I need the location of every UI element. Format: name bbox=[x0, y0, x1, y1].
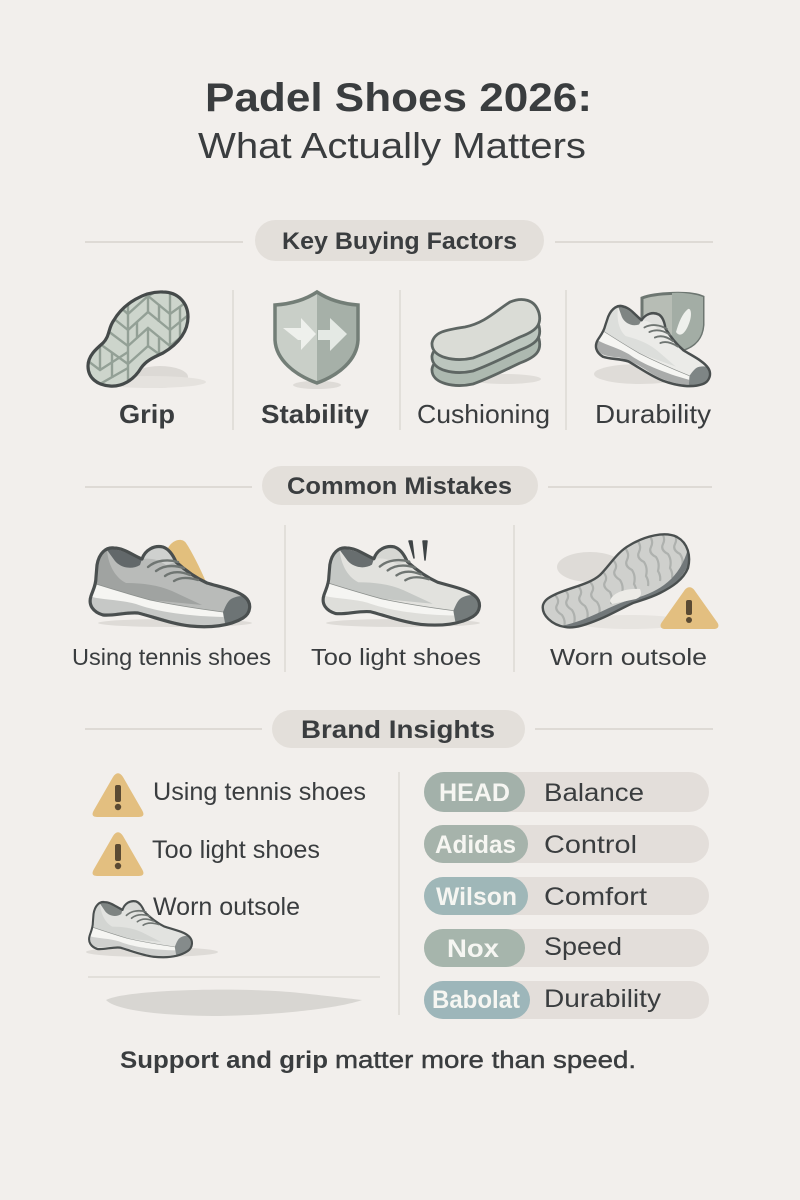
panel: using tennis shoes bbox=[72, 540, 271, 670]
row: HEAD: Balance bbox=[544, 779, 644, 807]
item: too light shoes: Too light shoes bbox=[152, 836, 320, 864]
panel: cushioning bbox=[417, 300, 550, 429]
takeaway text: Support and grip bbox=[120, 1047, 328, 1074]
label: Too light shoes bbox=[311, 644, 481, 670]
panel: too light shoes bbox=[311, 541, 481, 670]
item: using tennis shoes bbox=[93, 773, 366, 817]
section heading: Common Mistakes: Common Mistakes bbox=[287, 473, 512, 500]
panel: stability bbox=[261, 292, 370, 429]
label: Durability: Durability bbox=[595, 399, 711, 429]
icon: shield with arrows bbox=[275, 292, 358, 389]
row: Nox: Speed bbox=[544, 933, 622, 961]
row: Wilson: Wilson bbox=[436, 883, 517, 911]
panel: brand table bbox=[424, 772, 709, 1019]
section heading: Key Buying Factors bbox=[85, 220, 713, 261]
row: Nox: Nox bbox=[447, 935, 499, 963]
section heading: Key Buying Factors: Key Buying Factors bbox=[282, 228, 517, 255]
row: Wilson bbox=[424, 877, 709, 915]
takeaway text bbox=[120, 1047, 636, 1074]
row: Adidas: Adidas bbox=[435, 831, 516, 859]
row: Babolat: Babolat bbox=[432, 986, 521, 1014]
row: Babolat bbox=[424, 981, 709, 1019]
label: Grip: Grip bbox=[119, 399, 175, 429]
panel: mistakes checklist bbox=[86, 773, 380, 1016]
label: Using tennis shoes bbox=[72, 644, 271, 670]
icon: grey shoe with warning triangle bbox=[90, 540, 252, 627]
panel: durability bbox=[591, 293, 721, 429]
row: Adidas bbox=[424, 825, 709, 863]
item: using tennis shoes: Using tennis shoes bbox=[153, 778, 366, 806]
row: Wilson: Comfort bbox=[544, 883, 647, 911]
title: Padel Shoes 2026: bbox=[205, 76, 592, 120]
takeaway text: matter more than speed. bbox=[335, 1047, 636, 1074]
title: What Actually Matters bbox=[198, 125, 586, 166]
section heading: Brand Insights: Brand Insights bbox=[301, 716, 495, 744]
title bbox=[198, 76, 592, 166]
label: Cushioning: Cushioning bbox=[417, 399, 550, 429]
label: Worn outsole bbox=[550, 644, 707, 670]
row: HEAD bbox=[424, 772, 709, 812]
section heading: Brand Insights bbox=[85, 710, 713, 748]
icon: shoe sole with tread bbox=[86, 290, 206, 388]
item: worn outsole bbox=[86, 893, 300, 957]
icon: shoe with shield bbox=[591, 293, 721, 392]
icon: worn sole with warning triangle bbox=[543, 532, 718, 630]
row: HEAD: HEAD bbox=[439, 779, 510, 807]
row: Babolat: Durability bbox=[544, 985, 662, 1013]
icon: light shoe with motion ticks bbox=[323, 541, 480, 627]
row: Nox bbox=[424, 929, 709, 967]
item: worn outsole: Worn outsole bbox=[153, 893, 300, 921]
item: too light shoes bbox=[93, 832, 320, 876]
worn patch shadow bbox=[106, 990, 362, 1016]
panel: grip bbox=[84, 284, 206, 429]
row: Adidas: Control bbox=[544, 831, 637, 859]
icon: stacked insoles bbox=[432, 300, 541, 385]
label: Stability: Stability bbox=[261, 399, 370, 429]
panel: worn outsole bbox=[543, 532, 718, 670]
section heading: Common Mistakes bbox=[85, 466, 712, 505]
